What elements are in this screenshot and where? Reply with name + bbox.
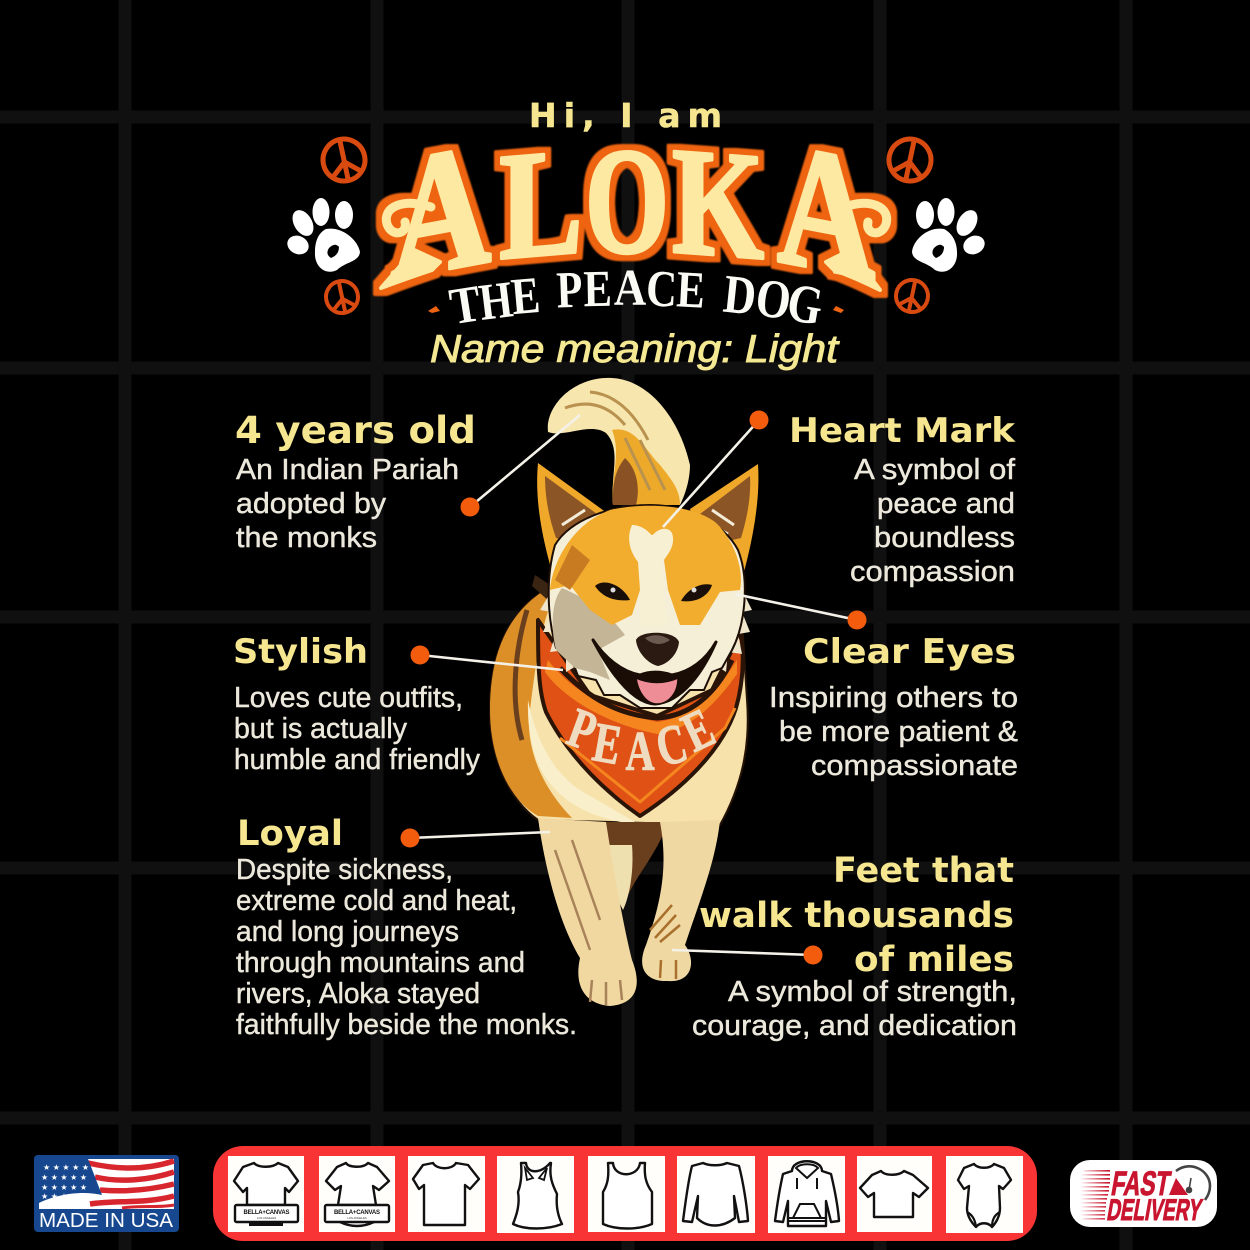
product: kids tee bbox=[857, 1156, 932, 1232]
badge: made in USA bbox=[34, 1155, 179, 1232]
subtitle: THE PEACE DOG: H bbox=[476, 271, 516, 332]
title logo: ALOKA bbox=[381, 104, 887, 318]
icon: left paw bbox=[284, 198, 360, 272]
text block: Loyal: faithfully beside the monks. bbox=[236, 1009, 577, 1041]
subtitle: THE PEACE DOG bbox=[446, 260, 827, 337]
text block: 4 years old: An Indian Pariah bbox=[236, 454, 459, 486]
dog left front leg bbox=[538, 818, 637, 1006]
text block: 4 years old bbox=[235, 409, 476, 554]
product: racerback tank bbox=[497, 1156, 574, 1233]
flag bbox=[39, 1159, 174, 1209]
dog nose and mouth bbox=[593, 633, 716, 704]
bandana text PEACE bbox=[560, 696, 724, 783]
subtitle side dashes bbox=[428, 306, 844, 313]
text block: 4 years old: adopted by bbox=[236, 488, 387, 520]
badge: fast delivery bbox=[1070, 1160, 1217, 1227]
badge: fast delivery: FAST bbox=[1109, 1165, 1173, 1203]
dog tail bbox=[548, 378, 690, 505]
name meaning: Name meaning: Light bbox=[430, 328, 840, 371]
text block: Heart Mark: peace and bbox=[877, 488, 1015, 520]
subtitle: THE PEACE DOG: A bbox=[614, 260, 646, 317]
product: t-shirt with label: BELLA+CANVAS bbox=[244, 1210, 290, 1216]
text block: Stylish: Stylish bbox=[233, 632, 368, 672]
callout lines bbox=[410, 415, 857, 955]
icon: right paw bbox=[912, 198, 988, 272]
text block: Stylish bbox=[233, 632, 480, 776]
subtitle: THE PEACE DOG: E bbox=[583, 261, 612, 318]
text block: Loyal: rivers, Aloka stayed bbox=[236, 978, 480, 1010]
text block: Clear Eyes: compassionate bbox=[811, 750, 1018, 782]
icon: peace sign lower left bbox=[323, 278, 361, 316]
product: fitted tee with label bbox=[319, 1156, 395, 1232]
bandana text PEACE: C bbox=[650, 712, 693, 779]
product strip bbox=[213, 1146, 1037, 1241]
product: t-shirt with label: LOS ANGELES bbox=[257, 1216, 276, 1220]
title logo: ALOKA: L bbox=[499, 116, 583, 292]
product: tank top bbox=[588, 1156, 665, 1232]
text block: Stylish: Loves cute outfits, bbox=[234, 682, 463, 714]
bandana text PEACE: E bbox=[589, 711, 626, 777]
product: fitted tee with label: BELLA+CANVAS bbox=[334, 1210, 380, 1216]
text block: Feet: of miles bbox=[854, 940, 1014, 980]
gauge bbox=[1176, 1166, 1210, 1200]
subtitle: THE PEACE DOG: T bbox=[446, 273, 485, 336]
text block: Feet: Feet that bbox=[833, 851, 1014, 891]
bandana text PEACE: P bbox=[560, 696, 604, 763]
bandana text PEACE: E bbox=[673, 697, 724, 764]
heading: Hi, I am: Hi, I am bbox=[529, 96, 722, 135]
text block: Loyal bbox=[236, 814, 577, 1041]
product: baby onesie bbox=[946, 1156, 1023, 1233]
text block: Heart Mark: A symbol of bbox=[854, 454, 1016, 486]
title logo: ALOKA: A bbox=[391, 104, 491, 318]
dog eyes bbox=[595, 582, 712, 601]
subtitle: THE PEACE DOG: E bbox=[509, 267, 542, 326]
dog back leg bbox=[598, 822, 668, 910]
text block: Stylish: humble and friendly bbox=[234, 744, 480, 776]
text block: Loyal: Despite sickness, bbox=[236, 854, 453, 886]
bandana text PEACE: A bbox=[625, 721, 655, 783]
text block: 4 years old: the monks bbox=[236, 522, 377, 554]
text block: Clear Eyes: Clear Eyes bbox=[803, 632, 1016, 672]
flag: ★ ★ ★ ★ ★ bbox=[43, 1163, 89, 1172]
product: unisex tee bbox=[408, 1156, 485, 1232]
text block: Feet: A symbol of strength, bbox=[728, 976, 1017, 1008]
flag: ★ ★ ★ bbox=[41, 1192, 68, 1201]
text block: Clear Eyes: be more patient & bbox=[779, 716, 1018, 748]
dog collar bbox=[532, 575, 558, 602]
text block: Stylish: but is actually bbox=[234, 713, 407, 745]
text block: Clear Eyes: Inspiring others to bbox=[769, 682, 1018, 714]
dog head bbox=[540, 505, 752, 708]
icon: peace sign top left bbox=[319, 135, 369, 185]
product: hoodie bbox=[768, 1156, 845, 1233]
text block: 4 years old: 4 years old bbox=[235, 409, 476, 452]
subtitle: THE PEACE DOG: E bbox=[675, 261, 707, 320]
text block: Loyal: through mountains and bbox=[236, 947, 525, 979]
subtitle: THE PEACE DOG: C bbox=[645, 261, 678, 319]
product: long sleeve bbox=[677, 1156, 755, 1233]
icon: peace sign lower right bbox=[893, 277, 931, 315]
text block: Loyal: and long journeys bbox=[236, 916, 459, 948]
subtitle: THE PEACE DOG: O bbox=[752, 267, 795, 331]
text block: Feet bbox=[692, 851, 1017, 1042]
text block: Heart Mark: boundless bbox=[874, 522, 1015, 554]
flag: ★ ★ ★ ★ ★ bbox=[41, 1173, 87, 1182]
badge: made in USA: MADE IN USA bbox=[39, 1210, 174, 1232]
left swash bbox=[386, 203, 431, 233]
text block: Heart Mark: compassion bbox=[850, 556, 1015, 588]
subtitle: THE PEACE DOG: G bbox=[783, 272, 827, 337]
text block: Feet: courage, and dedication bbox=[692, 1010, 1017, 1042]
subtitle: THE PEACE DOG: P bbox=[555, 262, 583, 319]
subtitle: THE PEACE DOG: D bbox=[721, 263, 759, 327]
icon: peace sign top right bbox=[885, 135, 935, 185]
product: fitted tee with label: LOS ANGELES bbox=[347, 1216, 367, 1220]
callout dots bbox=[400, 410, 866, 964]
flag: ★ ★ ★ ★ ★ bbox=[41, 1183, 87, 1192]
text block: Loyal: extreme cold and heat, bbox=[236, 885, 517, 917]
illustration: dog bbox=[490, 378, 758, 1006]
text block: Clear Eyes bbox=[769, 632, 1018, 782]
product: t-shirt with label bbox=[228, 1156, 304, 1232]
dog body bbox=[490, 590, 748, 825]
title logo: ALOKA: K bbox=[672, 115, 764, 292]
text block: Heart Mark bbox=[789, 411, 1016, 588]
text block: Feet: walk thousands bbox=[699, 896, 1014, 936]
title logo: ALOKA: A bbox=[777, 105, 875, 318]
dog ears bbox=[537, 463, 758, 572]
text block: Loyal: Loyal bbox=[237, 814, 343, 854]
speed lines bbox=[1080, 1170, 1110, 1220]
text block: Heart Mark: Heart Mark bbox=[789, 411, 1016, 451]
right swash bbox=[845, 203, 887, 233]
title logo: ALOKA: O bbox=[585, 118, 669, 285]
dog right front leg bbox=[642, 820, 720, 981]
dog bandana bbox=[538, 620, 743, 816]
